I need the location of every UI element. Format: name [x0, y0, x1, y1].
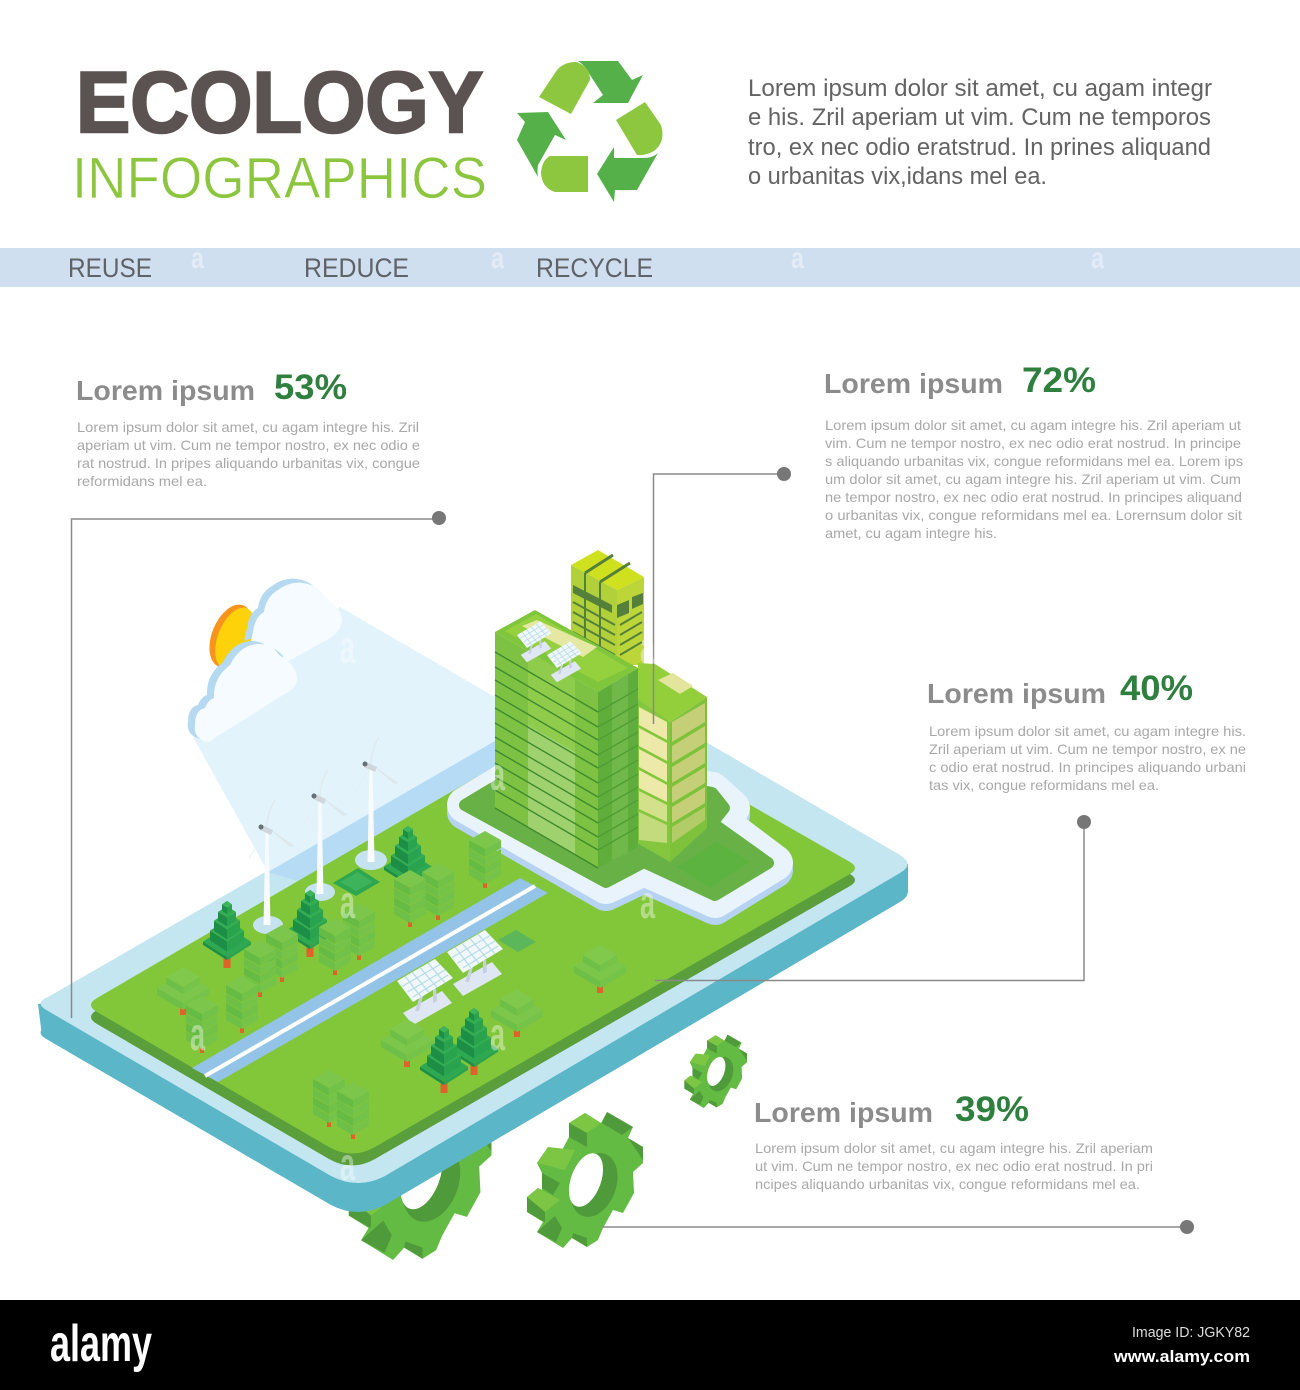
leader line: 40 percent [655, 815, 1091, 980]
section: 39 percent: Lorem ipsum dolor sit amet, cu agam integre his. Zril aperiam [755, 1140, 1153, 1156]
text block: intro paragraph: Lorem ipsum dolor sit amet, cu agam integr [748, 75, 1212, 102]
section: 72 percent: 72% [1022, 361, 1096, 400]
green landscape plate [91, 715, 855, 1166]
icon: large gear [527, 1112, 643, 1248]
text block: intro paragraph: o urbanitas vix,idans mel ea. [748, 163, 1047, 190]
watermark marks: a [340, 876, 355, 928]
icon: small gear [684, 1035, 747, 1108]
section: 40 percent: Lorem ipsum dolor sit amet, cu agam integre his. [929, 723, 1246, 739]
leader line: 39 percent [602, 1220, 1194, 1234]
navigation band: reuse, reduce, recycle: REDUCE [304, 253, 409, 283]
section: 40 percent [927, 669, 1246, 793]
text block: intro paragraph: e his. Zril aperiam ut vim. Cum ne temporos [748, 104, 1211, 131]
section: 40 percent: tas vix, congue reformidans mel ea. [929, 777, 1159, 793]
section: 72 percent: Lorem ipsum [824, 368, 1003, 399]
section: 72 percent [824, 361, 1243, 541]
title: Ecology Infographics [72, 55, 487, 211]
watermark marks: a [340, 1138, 355, 1190]
trees north of road [157, 826, 501, 1053]
building: main green tower [495, 610, 638, 868]
watermark marks: a [640, 621, 655, 673]
section: 72 percent: amet, cu agam integre his. [825, 525, 997, 541]
leader line: 53 percent [72, 511, 446, 1018]
section: 40 percent: Lorem ipsum [927, 678, 1106, 709]
wind turbines [249, 737, 399, 934]
watermark marks: a [1091, 242, 1104, 275]
leader line: 72 percent [654, 467, 791, 724]
section: 40 percent: c odio erat nostrud. In principes aliquando urbani [929, 759, 1246, 775]
isometric tablet device [38, 682, 908, 1212]
text block: intro paragraph: tro, ex nec odio eratstrud. In prines aliquand [748, 134, 1211, 161]
watermark marks: a [640, 876, 655, 928]
icon: rear gear under device [349, 1093, 492, 1260]
title: Ecology Infographics: INFOGRAPHICS [72, 146, 487, 211]
icon: recycle symbol [517, 61, 662, 202]
navigation band: reuse, reduce, recycle: REUSE [68, 253, 152, 283]
watermark marks: a [491, 242, 504, 275]
section: 39 percent: Lorem ipsum [754, 1097, 933, 1128]
section: 72 percent: o urbanitas vix, congue reformidans mel ea. Lorernsum dolor sit [825, 507, 1242, 523]
section: 72 percent: Lorem ipsum dolor sit amet, cu agam integre his. Zril aperiam ut [825, 417, 1241, 433]
section: 72 percent: s aliquando urbanitas vix, congue reformidans mel ea. Lorem ips [825, 453, 1243, 469]
watermark marks: a [791, 242, 804, 275]
section: 39 percent: ut vim. Cum ne tempor nostro, ex nec odio erat nostrud. In pri [755, 1158, 1153, 1174]
section: 53 percent: Lorem ipsum [76, 375, 255, 406]
section: 40 percent: Zril aperiam ut vim. Cum ne tempor nostro, ex ne [929, 741, 1246, 757]
footer bar [0, 1300, 1300, 1390]
section: 72 percent: ne tempor nostro, ex nec odio erat nostrud. In principes aliquand [825, 489, 1242, 505]
icon: clouds [188, 579, 342, 742]
section: 72 percent: vim. Cum ne tempor nostro, ex nec odio erat nostrud. In principe [825, 435, 1241, 451]
section: 39 percent: 39% [955, 1090, 1029, 1129]
text block: intro paragraph [748, 75, 1212, 190]
building: small cream tower [632, 663, 707, 862]
watermark marks: a [340, 621, 355, 673]
section: 53 percent [76, 368, 420, 489]
navigation band: reuse, reduce, recycle [0, 248, 1300, 287]
title: Ecology Infographics: ECOLOGY [76, 55, 483, 151]
navigation band: reuse, reduce, recycle: RECYCLE [536, 253, 653, 283]
building: rear yellow tower [571, 550, 644, 665]
watermark marks: a [190, 1008, 205, 1060]
road [192, 878, 548, 1082]
rooftop solar panels [517, 621, 582, 682]
section: 53 percent: reformidans mel ea. [77, 473, 207, 489]
footer bar: alamy [50, 1315, 152, 1373]
footer bar: Image ID: JGKY82 [1132, 1324, 1250, 1341]
section: 39 percent [754, 1090, 1153, 1192]
section: 53 percent: 53% [274, 368, 347, 407]
section: 53 percent: Lorem ipsum dolor sit amet, cu agam integre his. Zril [77, 419, 419, 435]
section: 53 percent: aperiam ut vim. Cum ne tempor nostro, ex nec odio e [77, 437, 420, 453]
footer bar: www.alamy.com [1113, 1347, 1250, 1366]
icon: sun [201, 598, 263, 674]
light beam from clouds [193, 607, 495, 872]
section: 72 percent: um dolor sit amet, cu agam integre his. Zril aperiam ut vim. Cum [825, 471, 1241, 487]
watermark marks: a [191, 242, 204, 275]
watermark marks: a [490, 1008, 505, 1060]
building plaza [465, 760, 775, 907]
trees south of road [313, 945, 626, 1139]
watermark marks [190, 242, 1104, 1190]
section: 53 percent: rat nostrud. In pripes aliquando urbanitas vix, congue [77, 455, 420, 471]
section: 39 percent: ncipes aliquando urbanitas vix, congue reformidans mel ea. [755, 1176, 1140, 1192]
section: 40 percent: 40% [1120, 669, 1193, 708]
solar panels on ground [397, 930, 536, 1025]
beam over device edge [268, 741, 495, 888]
watermark marks: a [490, 748, 505, 800]
